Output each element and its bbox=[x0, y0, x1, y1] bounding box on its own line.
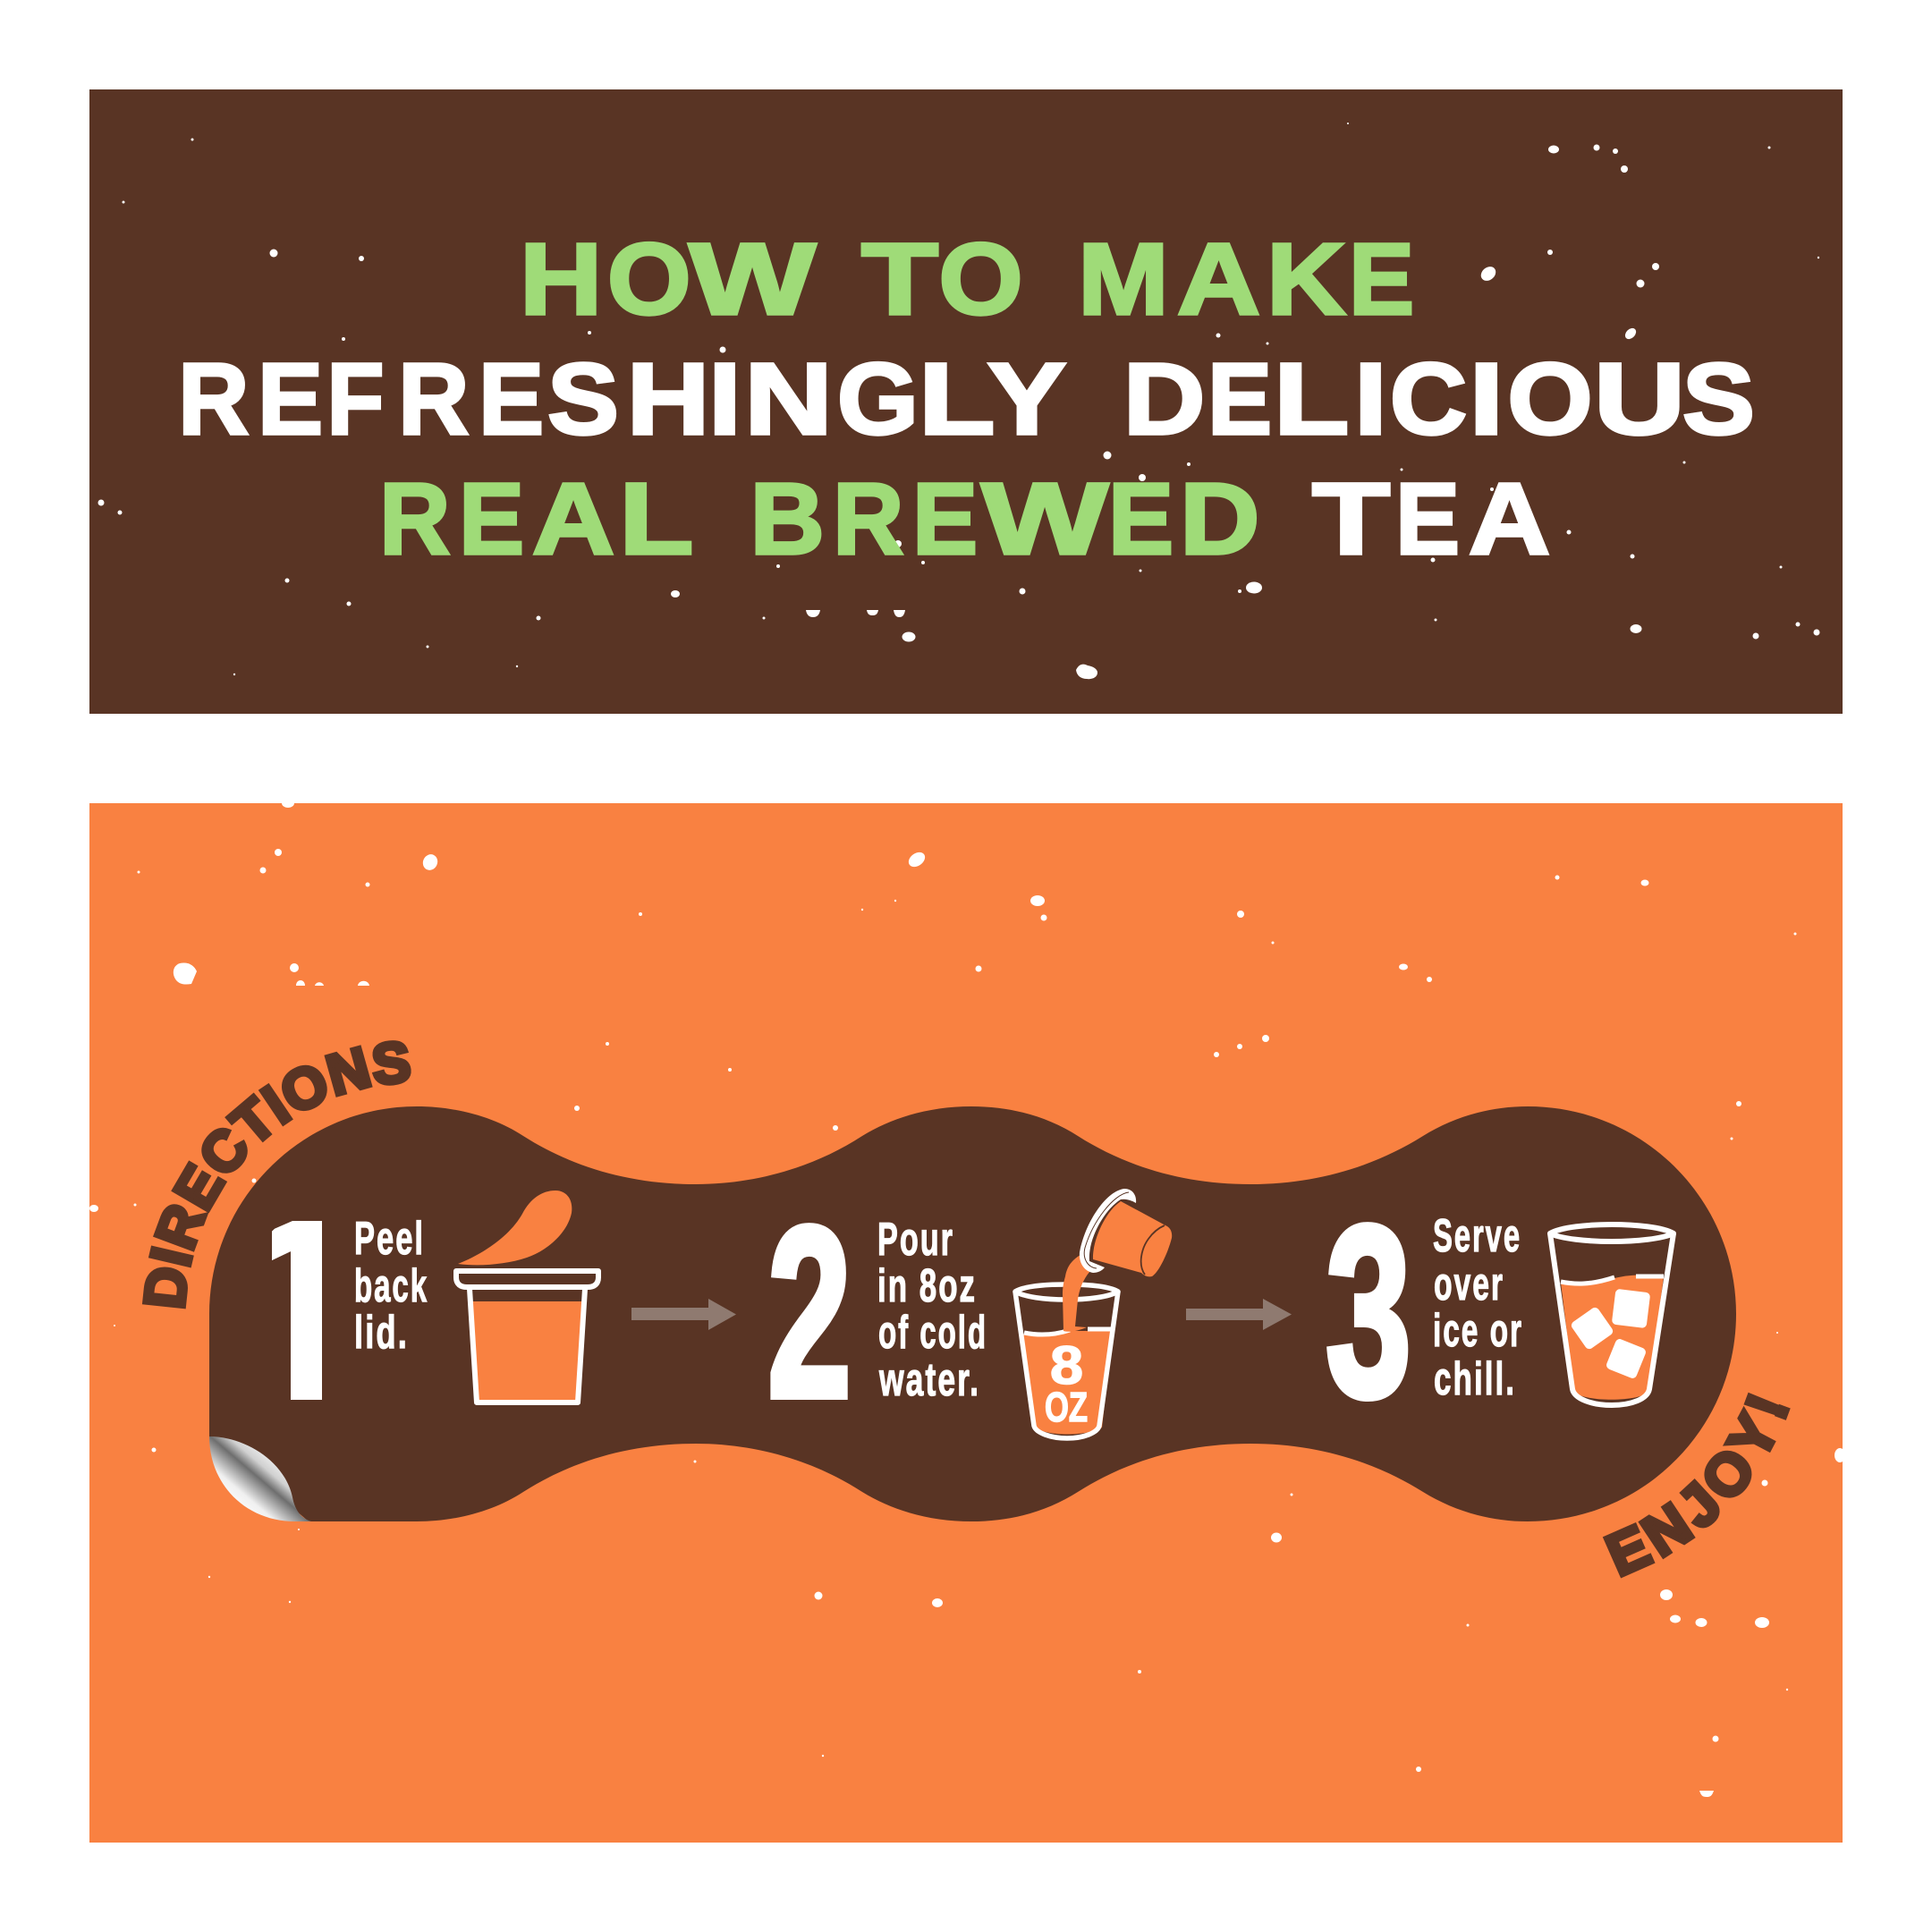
step 1 text bbox=[354, 1213, 428, 1359]
step 1 bbox=[272, 1191, 601, 1405]
step 1 number: 1 bbox=[256, 1179, 345, 1451]
step 1 text: back bbox=[354, 1260, 428, 1312]
heading line 2: G bbox=[837, 343, 919, 456]
heading line 3: A bbox=[1469, 462, 1550, 576]
heading line 2: E bbox=[1208, 343, 1272, 456]
heading line 1: O bbox=[939, 223, 1023, 336]
heading line 3: W bbox=[981, 462, 1109, 576]
arrow: step 1 to 2 bbox=[631, 1299, 736, 1330]
icon: tea cup with peeled lid bbox=[456, 1191, 598, 1404]
heading line 1: O bbox=[607, 223, 691, 336]
peeling sticker corner bbox=[209, 1436, 311, 1521]
heading line 3: A bbox=[532, 462, 614, 576]
step 3 text bbox=[1433, 1210, 1523, 1405]
heading line 2: S bbox=[1682, 343, 1755, 456]
glass label oz: OZ bbox=[1045, 1384, 1088, 1430]
step 2 text: Pour bbox=[877, 1214, 954, 1266]
heading line 3 bbox=[379, 462, 1550, 576]
heading line 2: I bbox=[1469, 343, 1504, 456]
step 2 number: 2 bbox=[767, 1176, 852, 1448]
heading line 2 bbox=[178, 343, 1755, 456]
heading line 3: E bbox=[1395, 462, 1460, 576]
heading line 3: T bbox=[1312, 462, 1390, 576]
heading line 3: D bbox=[1180, 462, 1259, 576]
heading line 2: E bbox=[258, 343, 323, 456]
heading line 1: T bbox=[861, 223, 938, 336]
heading line 2: F bbox=[327, 343, 384, 456]
step 1 text: lid. bbox=[354, 1307, 409, 1359]
heading line 1: W bbox=[689, 223, 817, 336]
heading line 2: C bbox=[1390, 343, 1467, 456]
heading line 2: R bbox=[398, 343, 469, 456]
heading line 1: M bbox=[1078, 223, 1169, 336]
heading line 2: H bbox=[627, 343, 709, 456]
panel: title banner bbox=[89, 89, 1843, 714]
heading line 2: R bbox=[178, 343, 249, 456]
step 2 bbox=[767, 1176, 1172, 1448]
heading line 2: I bbox=[708, 343, 741, 456]
heading line 2: I bbox=[1354, 343, 1387, 456]
heading line 2: L bbox=[919, 343, 995, 456]
banner speckles bbox=[98, 123, 1819, 679]
heading line 1: E bbox=[1349, 223, 1414, 336]
arrow: step 2 to 3 bbox=[1186, 1299, 1292, 1330]
heading line 2: N bbox=[744, 343, 833, 456]
icon: pouring cup into glass with 8 oz bbox=[1015, 1189, 1172, 1438]
heading line 1: H bbox=[520, 223, 602, 336]
step 2 text: water. bbox=[878, 1354, 980, 1406]
icon: glass of iced tea bbox=[1550, 1224, 1674, 1405]
heading line 1 bbox=[520, 223, 1414, 336]
heading line 2: E bbox=[479, 343, 544, 456]
step 2 text bbox=[877, 1214, 987, 1406]
heading line 1: A bbox=[1177, 223, 1260, 336]
heading line 3: E bbox=[1108, 462, 1174, 576]
heading line 2: S bbox=[547, 343, 619, 456]
step 2 text: in 8oz bbox=[877, 1260, 977, 1312]
heading line 3: E bbox=[912, 462, 978, 576]
step 3 text: Serve bbox=[1433, 1210, 1521, 1262]
step 3 bbox=[1326, 1175, 1674, 1447]
step 3 text: over bbox=[1434, 1258, 1504, 1310]
heading line 3: B bbox=[750, 462, 825, 576]
panel: directions background bbox=[89, 799, 1845, 1843]
heading line 2: D bbox=[1123, 343, 1205, 456]
heading line 2: L bbox=[1274, 343, 1349, 456]
glass label 8: 8 bbox=[1050, 1335, 1083, 1395]
heading line 2: O bbox=[1507, 343, 1593, 456]
curved label: DIRECTIONS: DIRECTIONS bbox=[141, 1040, 411, 1309]
heading line 3: R bbox=[379, 462, 450, 576]
step 3 number: 3 bbox=[1326, 1175, 1411, 1447]
step 2 text: of cold bbox=[878, 1307, 987, 1359]
heading line 2: U bbox=[1594, 343, 1685, 456]
step 3 text: chill. bbox=[1434, 1353, 1516, 1405]
panel: brown wavy directions blob bbox=[209, 1106, 1736, 1521]
heading line 3: R bbox=[833, 462, 903, 576]
heading line 3: L bbox=[619, 462, 693, 576]
ice cubes bbox=[1570, 1289, 1650, 1379]
heading line 2: Y bbox=[987, 343, 1066, 456]
step 3 text: ice or bbox=[1433, 1305, 1523, 1357]
heading line 3: E bbox=[459, 462, 524, 576]
orange panel speckles bbox=[89, 799, 1845, 1797]
curved label: ENJOY!: ENJOY! bbox=[1603, 1392, 1791, 1578]
heading line 1: K bbox=[1267, 223, 1345, 336]
step 1 text: Peel bbox=[354, 1213, 425, 1265]
